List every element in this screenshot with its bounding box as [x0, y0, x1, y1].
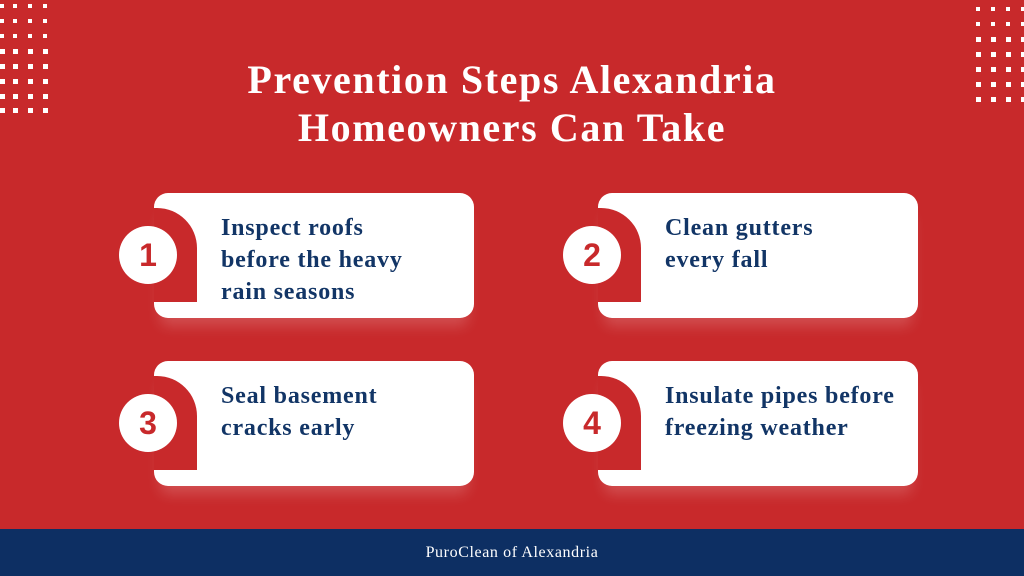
dots: top-left decoration: [0, 4, 48, 113]
card 2: [598, 193, 918, 318]
title: Prevention Steps Alexandria: [247, 57, 777, 102]
text 1: rain seasons: [221, 279, 355, 305]
number 3: 3: [139, 405, 157, 441]
number 4: 4: [583, 405, 601, 441]
text 4: Insulate pipes before: [665, 383, 895, 409]
text 3: cracks early: [221, 415, 355, 441]
footer: PuroClean of Alexandria: [426, 544, 598, 561]
footer: [0, 529, 1024, 576]
number 2: [563, 226, 621, 284]
text 2: Clean gutters: [665, 215, 813, 241]
text 2: [665, 215, 813, 273]
number 4: [563, 394, 621, 452]
dots: top-right decoration: [976, 7, 1024, 102]
text 1: before the heavy: [221, 247, 403, 273]
number 3: [119, 394, 177, 452]
card 4: [598, 361, 918, 486]
text 4: [665, 383, 895, 441]
text 4: freezing weather: [665, 415, 849, 441]
card 1: [154, 193, 474, 318]
text 2: every fall: [665, 247, 768, 273]
card 3: [154, 361, 474, 486]
title: [247, 57, 777, 150]
number 1: [119, 226, 177, 284]
text 3: [221, 383, 377, 441]
text 3: Seal basement: [221, 383, 377, 409]
text 1: [221, 215, 403, 305]
title: Homeowners Can Take: [298, 105, 726, 150]
number 2: 2: [583, 237, 601, 273]
text 1: Inspect roofs: [221, 215, 364, 241]
number 1: 1: [139, 237, 157, 273]
